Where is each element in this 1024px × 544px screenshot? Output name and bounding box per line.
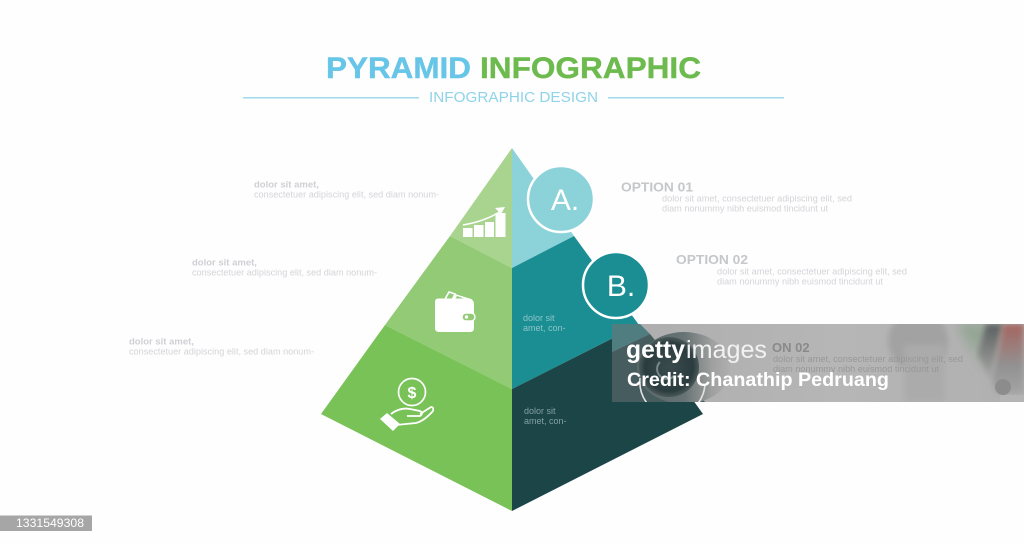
- pyramid text: bottom layer: amet, con-: [524, 416, 567, 426]
- pyramid text: middle layer: amet, con-: [523, 323, 566, 333]
- left label 3: consectetuer adipiscing elit, sed diam nonum-: [129, 346, 314, 358]
- left face bottom layer: [321, 325, 512, 511]
- image id tag: [0, 516, 92, 531]
- pyramid text: bottom layer: [524, 406, 567, 426]
- left label 2: consectetuer adipiscing elit, sed diam nonum-: [192, 268, 377, 278]
- left label 3: [129, 336, 314, 358]
- left face middle layer: [385, 236, 512, 389]
- icon: hand with coin: $: [408, 385, 417, 402]
- watermark band: [612, 324, 1024, 402]
- pyramid text: middle layer: dolor sit: [523, 313, 555, 323]
- image id tag: 1331549308: [16, 518, 84, 530]
- watermark band: diam nonummy nibh euismod tincidunt ut: [773, 364, 939, 375]
- title: PYRAMID: [326, 52, 471, 85]
- option 01 text: diam nonummy nibh euismod tincidunt ut: [662, 204, 828, 214]
- left label 3: dolor sit amet,: [129, 336, 194, 348]
- option 02 text: OPTION 02: [676, 252, 748, 267]
- right face top layer: [512, 148, 574, 268]
- left label 1: consectetuer adipiscing elit, sed diam nonum-: [254, 190, 439, 200]
- left label 1: [254, 180, 439, 200]
- icon: wallet: [435, 292, 475, 332]
- watermark: getty logo text: [626, 336, 767, 364]
- icon: hand with coin: [380, 378, 433, 431]
- title: [326, 52, 701, 85]
- watermark band: dolor sit amet, consectetuer adipiscing elit, sed: [773, 354, 963, 365]
- watermark: abstract shapes: [612, 324, 1024, 402]
- title: INFOGRAPHIC: [480, 52, 701, 85]
- right face middle layer: [512, 236, 639, 389]
- option 02 text: diam nonummy nibh euismod tincidunt ut: [717, 276, 883, 288]
- option 01 text: OPTION 01: [621, 180, 693, 194]
- option 01 text: dolor sit amet, consectetuer adipiscing elit, sed: [662, 194, 852, 204]
- option 01 text: [621, 180, 852, 214]
- watermark: ghost option text: ON 02: [772, 340, 810, 355]
- pyramid text: middle layer: [523, 313, 566, 333]
- right face bottom layer: [512, 325, 703, 511]
- watermark: getty logo text: getty: [626, 336, 685, 364]
- left face top layer: [450, 148, 512, 268]
- badge B: B.: [607, 270, 635, 303]
- pyramid text: bottom layer: dolor sit: [524, 406, 556, 416]
- pyramid: [321, 148, 703, 511]
- watermark: sphere: [637, 332, 723, 402]
- option 02 text: [676, 252, 907, 288]
- watermark: credit: Credit: Chanathip Pedruang: [627, 369, 889, 391]
- left label 2: [192, 258, 377, 278]
- left label 1: dolor sit amet,: [254, 180, 319, 190]
- watermark: getty logo text: images: [686, 336, 767, 364]
- left label 2: dolor sit amet,: [192, 258, 257, 268]
- subtitle with rules: INFOGRAPHIC DESIGN: [429, 89, 598, 106]
- badge A: [528, 166, 594, 232]
- option 02 text: dolor sit amet, consectetuer adipiscing elit, sed: [717, 266, 907, 278]
- badge A: A.: [551, 184, 579, 217]
- badge B: [583, 252, 649, 318]
- icon: growth chart: [463, 207, 506, 237]
